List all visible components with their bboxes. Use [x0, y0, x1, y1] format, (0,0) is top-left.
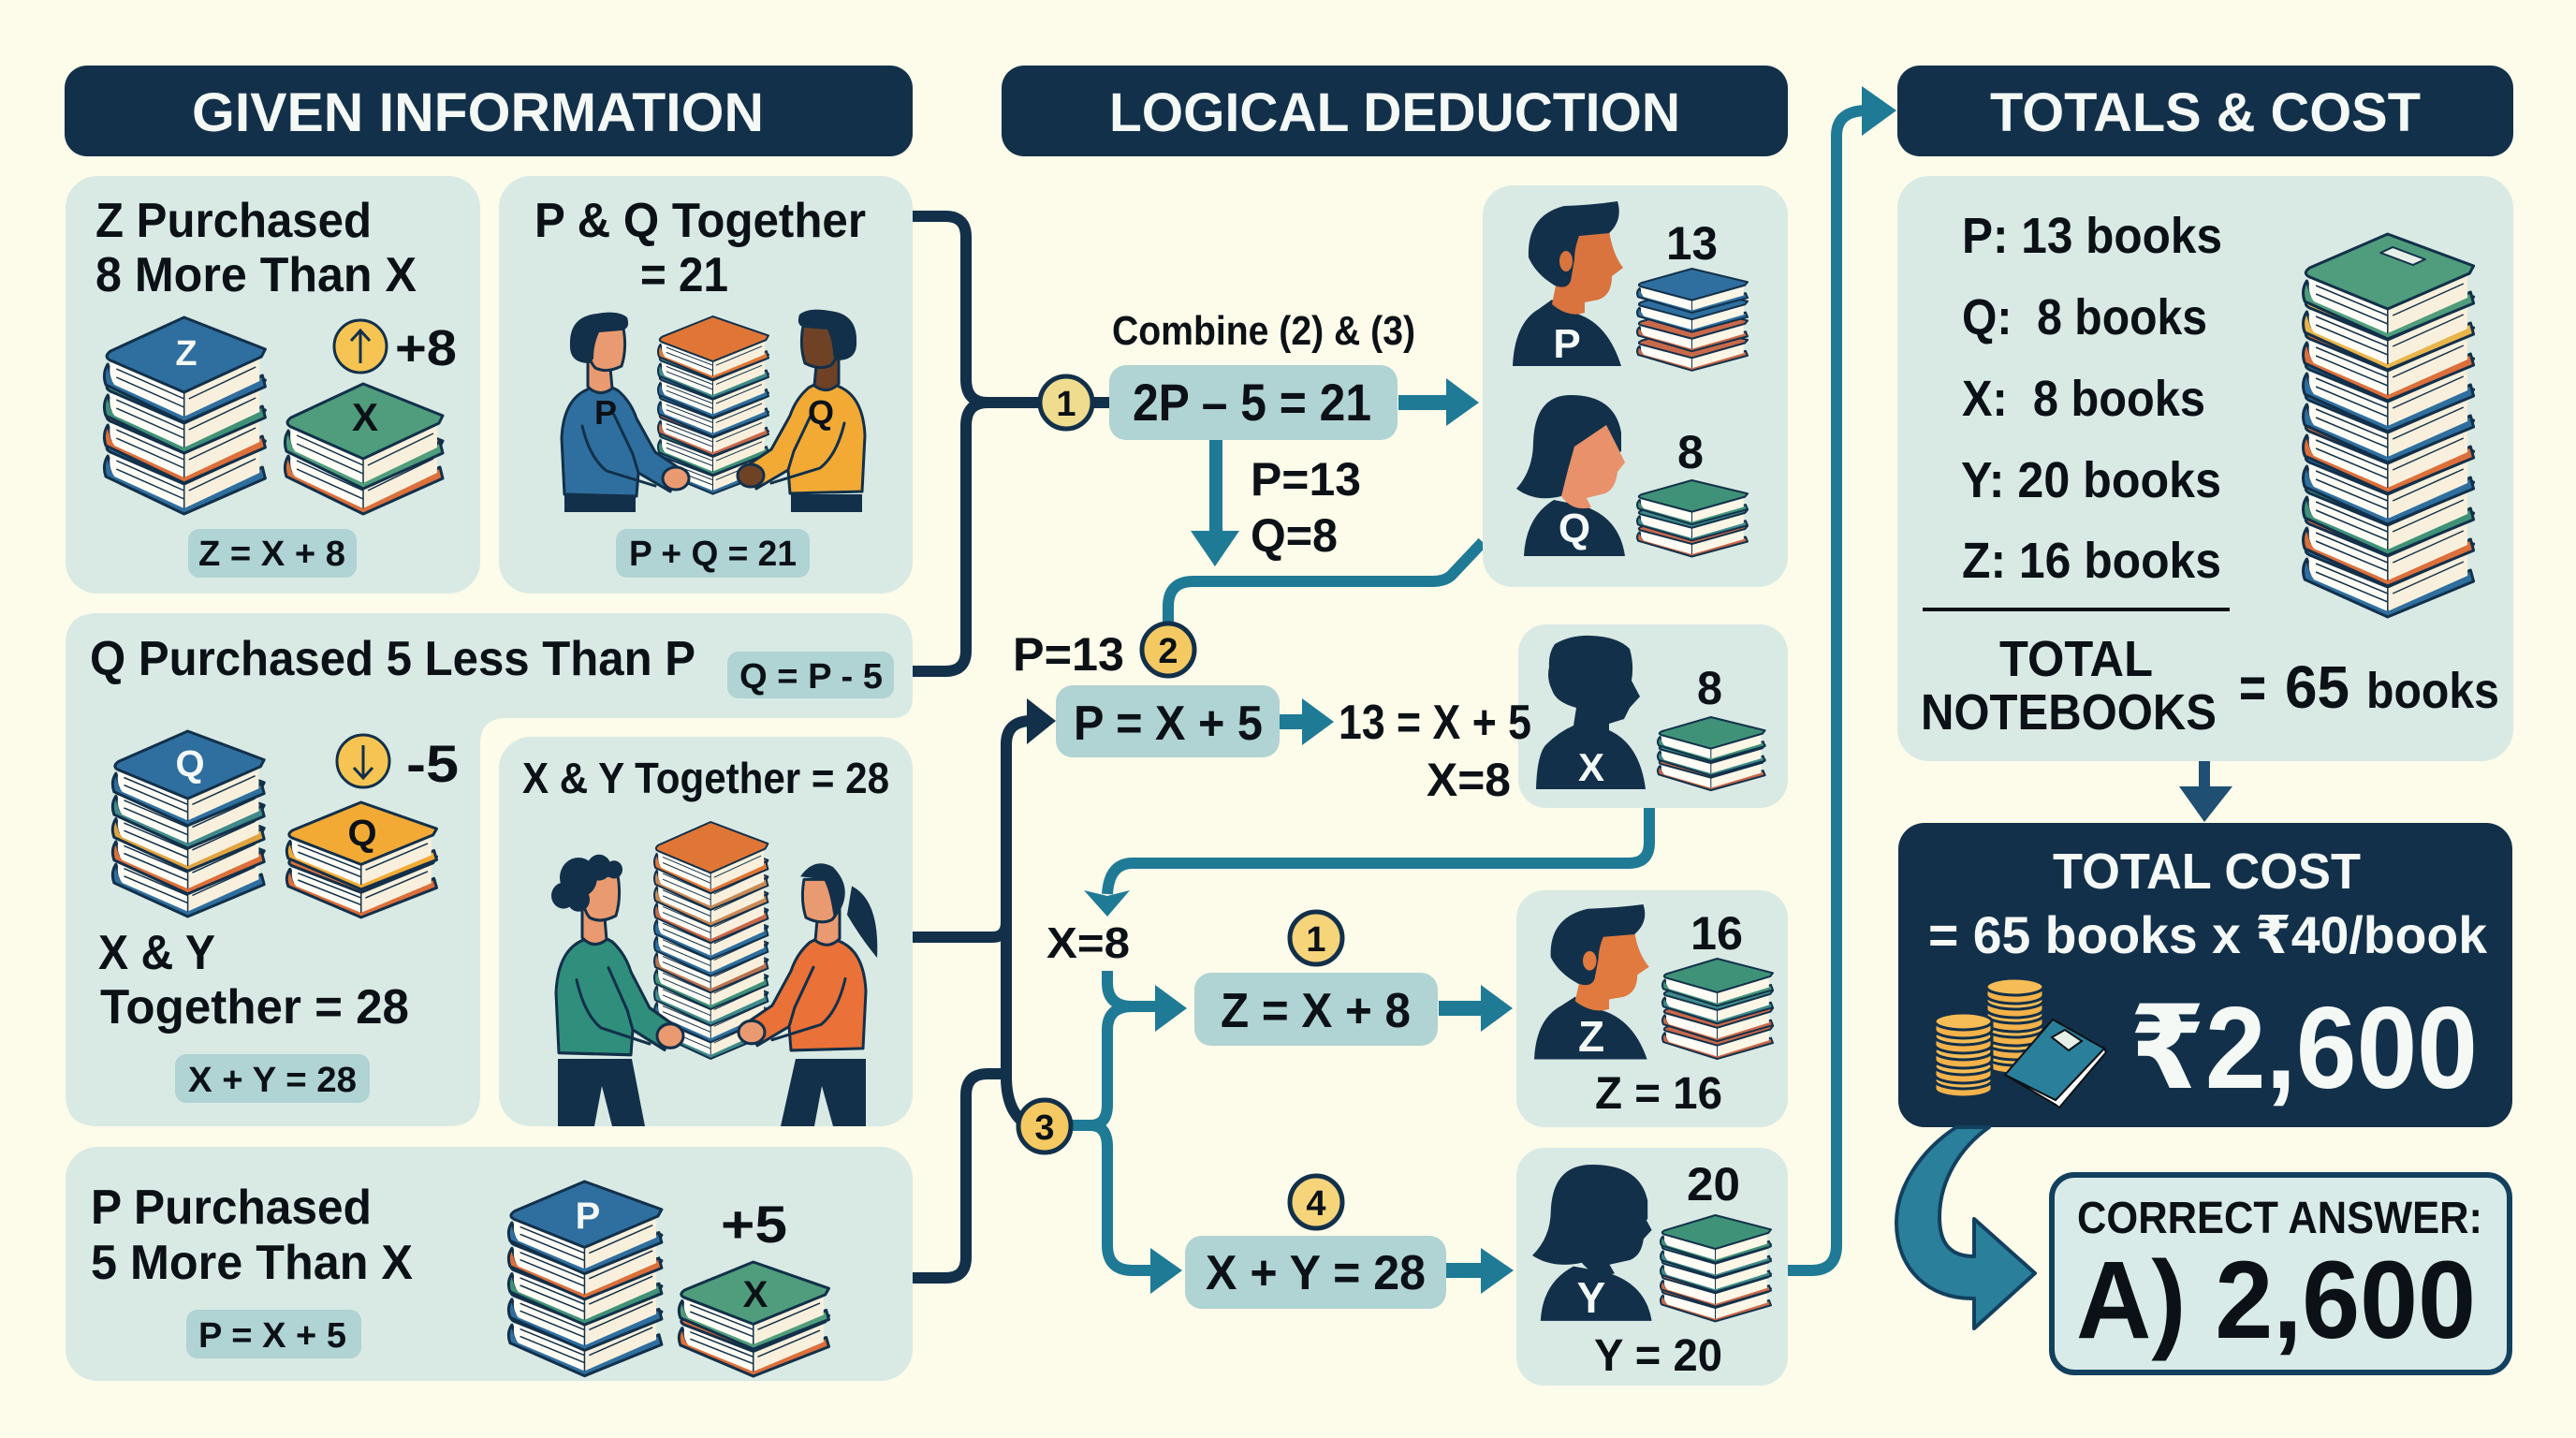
list: books per person: P: 13 books	[1962, 208, 2222, 264]
panel: P and Q together	[499, 176, 913, 594]
badge: step 1	[1040, 376, 1092, 429]
panel: book totals	[1897, 176, 2513, 761]
icon: down arrow badge	[337, 735, 389, 787]
value: P=13 input: P=13	[1013, 628, 1124, 681]
panel: P purchased 5 more than X: 5 More Than X	[91, 1236, 413, 1290]
panel: Q purchased 5 less than P: X & Y	[98, 926, 215, 980]
figure: Y head	[1532, 1165, 1652, 1322]
figure: Z head: Z	[1578, 1012, 1604, 1061]
figure: person X	[551, 855, 683, 1126]
equation pill	[175, 1054, 370, 1103]
header: totals and cost	[1897, 66, 2513, 156]
panel: Q purchased 5 less than P: Q	[347, 813, 377, 854]
panel: correct answer: A) 2,600	[2076, 1239, 2476, 1362]
figure: person Y	[739, 863, 877, 1126]
figure: X head: X	[1578, 745, 1604, 789]
panel: Q purchased 5 less than P: -5	[406, 734, 459, 793]
icon: total book stack	[2304, 234, 2474, 617]
arrow: substitution	[1280, 698, 1334, 745]
panel: P purchased 5 more than X	[66, 1147, 913, 1381]
values: P=13 Q=8: Q=8	[1251, 509, 1338, 562]
panel: P and Q results	[1483, 185, 1788, 587]
figure: Q head: Q	[1559, 506, 1590, 551]
panel: total cost: ₹2,600	[2130, 984, 2478, 1113]
figure: P head: P	[1553, 321, 1581, 367]
total notebooks line: 65	[2285, 653, 2349, 721]
panel: P purchased 5 more than X: X	[743, 1274, 768, 1315]
connector: X result down to X=8	[1084, 808, 1649, 917]
equation pill	[186, 1310, 361, 1358]
list: books per person	[1961, 208, 2222, 589]
badge: step 2	[1142, 624, 1194, 676]
panel: Q purchased 5 less than P: Together = 28	[100, 980, 409, 1034]
icon: coins and book	[1935, 978, 2106, 1108]
panel: X and Y together: X & Y Together = 28	[522, 754, 889, 802]
panel: Z purchased 8 more than X: +8	[395, 320, 457, 376]
equation pill: Q = P - 5	[739, 657, 883, 697]
icon: Q small book stack	[286, 802, 436, 917]
equation: Z = X + 8: Z = X + 8	[1221, 984, 1411, 1038]
panel: Q purchased 5 less than P: Q	[175, 743, 205, 785]
badge: step 3: 3	[1034, 1108, 1055, 1148]
icon: X book stack	[679, 1262, 829, 1376]
icon: Q large book stack	[112, 731, 264, 917]
panel: correct answer	[2052, 1175, 2510, 1372]
arrow: cost to answer	[1896, 1127, 2035, 1328]
equation: Z = X + 8	[1194, 973, 1438, 1046]
connector: result P and Q to step 2	[1168, 542, 1483, 627]
panel: P and Q together: P & Q Together	[534, 194, 866, 248]
panel: P purchased 5 more than X: P	[576, 1196, 600, 1237]
value: X=8: X=8	[1046, 918, 1130, 967]
figure: P head	[1513, 201, 1623, 367]
panel: P purchased 5 more than X: P Purchased	[91, 1181, 372, 1235]
total notebooks line: NOTEBOOKS	[1921, 684, 2217, 741]
icon: P 13 books	[1637, 269, 1748, 371]
header: logical deduction	[1002, 66, 1788, 156]
icon: Z 16 books	[1662, 959, 1773, 1059]
panel: Y result: Y = 20	[1594, 1331, 1722, 1381]
figure: person Q	[738, 310, 865, 512]
panel: X result: 8	[1697, 662, 1722, 714]
connector: Y result up to totals header	[1788, 86, 1896, 1270]
list: books per person: X: 8 books	[1962, 371, 2205, 427]
list: books per person: Y: 20 books	[1961, 452, 2221, 508]
badge: step 3	[1018, 1100, 1071, 1152]
header: logical deduction: LOGICAL DEDUCTION	[1109, 82, 1680, 143]
figure: Q head	[1516, 395, 1625, 556]
total notebooks line: TOTAL	[1999, 631, 2153, 687]
equation: X + Y = 28: X + Y = 28	[1206, 1246, 1426, 1300]
working: solve for X	[1339, 696, 1531, 806]
list: books per person: Z: 16 books	[1962, 533, 2221, 589]
connector: given facts to step 1	[913, 216, 1109, 671]
working: solve for X: X=8	[1427, 754, 1511, 806]
equation: P = X + 5	[1056, 685, 1280, 757]
panel: P and Q results: 13	[1666, 217, 1718, 270]
values: P=13 Q=8	[1251, 453, 1361, 562]
header: given information: GIVEN INFORMATION	[192, 82, 764, 143]
arrow: down to P and Q values	[1191, 440, 1239, 566]
badge: Z equation: 1	[1306, 920, 1326, 960]
connector: given facts to steps 2 and 3	[913, 698, 1056, 1278]
panel: Z purchased 8 more than X: X	[352, 395, 378, 439]
arrow: to Z result	[1439, 985, 1513, 1032]
panel: Y result	[1516, 1148, 1788, 1386]
icon: Z book stack	[104, 317, 265, 514]
panel: X result	[1518, 624, 1788, 808]
panel: total cost: = 65 books x ₹40/book	[1928, 905, 2488, 964]
badge: Z equation	[1290, 912, 1342, 964]
icon: P book stack	[508, 1181, 662, 1376]
panel: correct answer: CORRECT ANSWER:	[2077, 1194, 2482, 1243]
connector: step 3 branches	[1069, 971, 1187, 1294]
panel: X and Y together	[499, 737, 913, 1126]
icon: shared book stack	[658, 316, 768, 494]
icon: X 8 books	[1658, 717, 1765, 790]
panel: Z result	[1516, 890, 1788, 1127]
arrow: to Y result	[1446, 1248, 1514, 1294]
panel: P and Q together: = 21	[640, 248, 728, 302]
badge: step 4	[1290, 1176, 1342, 1228]
total notebooks line	[1921, 631, 2499, 741]
values: P=13 Q=8: P=13	[1251, 453, 1361, 506]
icon: shared tall book stack	[654, 822, 768, 1059]
arrow: to P and Q results	[1398, 378, 1479, 426]
panel: Y result: 20	[1687, 1158, 1740, 1211]
panel: Z purchased 8 more than X: Z	[175, 334, 198, 374]
header: totals and cost: TOTALS & COST	[1990, 82, 2421, 143]
panel: total cost: TOTAL COST	[2053, 844, 2361, 900]
list: books per person: Q: 8 books	[1962, 289, 2207, 345]
panel: Q purchased 5 less than P	[66, 613, 913, 1126]
panel: P and Q results: 8	[1677, 426, 1704, 478]
icon: X book stack	[285, 384, 443, 514]
equation pill: P = X + 5	[198, 1316, 346, 1356]
panel: total cost	[1898, 823, 2512, 1127]
badge: step 2: 2	[1158, 632, 1178, 671]
panel: P and Q together: P	[594, 393, 617, 432]
working: solve for X: 13 = X + 5	[1339, 696, 1531, 750]
panel: Q purchased 5 less than P: Q Purchased 5 Less Than P	[90, 632, 695, 686]
equation pill: X + Y = 28	[188, 1061, 357, 1100]
equation: P = X + 5: P = X + 5	[1074, 697, 1263, 751]
figure: Y head: Y	[1577, 1273, 1605, 1322]
figure: Z head	[1534, 904, 1649, 1061]
badge: step 1: 1	[1056, 385, 1076, 424]
badge: step 4: 4	[1306, 1184, 1326, 1224]
figure: X head	[1536, 636, 1646, 789]
panel: Z purchased 8 more than X	[66, 176, 480, 594]
panel: P and Q together: Q	[808, 393, 834, 432]
panel: Z result: 16	[1690, 907, 1743, 960]
total notebooks line: books	[2366, 663, 2499, 719]
total notebooks line: =	[2239, 656, 2266, 721]
panel: P purchased 5 more than X: +5	[721, 1195, 787, 1254]
icon: Y 20 books	[1661, 1215, 1771, 1321]
figure: person P	[562, 313, 689, 512]
equation pill: P + Q = 21	[629, 535, 797, 574]
equation pill: Z = X + 8	[198, 535, 345, 574]
icon: up arrow badge	[334, 320, 387, 373]
equation: 2P - 5 = 21: 2P – 5 = 21	[1133, 373, 1371, 432]
icon: Q 8 books	[1637, 480, 1748, 556]
header: given information	[65, 66, 913, 156]
panel: Z result: Z = 16	[1595, 1069, 1722, 1119]
equation: X + Y = 28	[1185, 1236, 1446, 1309]
panel: Z purchased 8 more than X: Z Purchased	[95, 194, 372, 248]
arrow: totals to cost	[2179, 761, 2232, 822]
panel: Z purchased 8 more than X: 8 More Than X	[95, 248, 417, 302]
label: combine step: Combine (2) & (3)	[1112, 308, 1415, 354]
